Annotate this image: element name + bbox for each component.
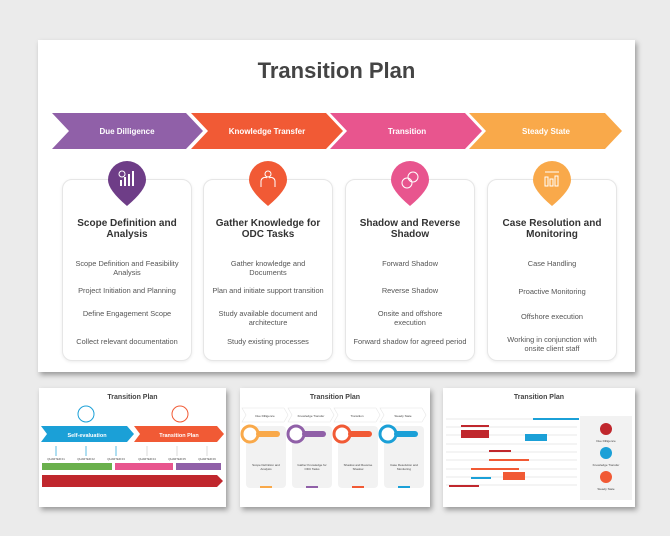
card: Gather Knowledge: Plan and initiate support transition	[212, 286, 324, 295]
thumbnail 3: Due Dilligence	[596, 439, 616, 443]
card: Case Resolution: Case Resolution and	[503, 218, 601, 229]
thumbnail 1: QUARTER 04	[138, 457, 156, 461]
thumbnail 1: QUARTER 06	[198, 457, 216, 461]
thumbnail 2: Monitoring	[397, 467, 411, 471]
chevron: Steady State: Steady State	[522, 127, 571, 136]
thumbnail 2: Transition Plan	[310, 394, 360, 401]
card: Scope Definition: Scope Definition and Feasibility	[75, 259, 179, 268]
chevron: Due Dilligence: Due Dilligence	[99, 127, 155, 136]
card: Case Resolution: Case Handling	[528, 259, 576, 268]
card: Shadow: Reverse Shadow	[382, 286, 438, 295]
card: Scope Definition: Project Initiation and Planning	[78, 286, 176, 295]
chevron: Transition	[330, 113, 482, 149]
card: Gather Knowledge: ODC Tasks	[242, 229, 294, 240]
card: Case Resolution	[487, 179, 617, 361]
chevron: Transition: Transition	[388, 127, 426, 136]
thumbnail 2: Gather Knowledge for	[297, 463, 327, 467]
chevron: Knowledge Transfer	[191, 113, 343, 149]
card: Gather Knowledge: Study existing processes	[227, 337, 309, 346]
thumbnail 1: QUARTER 01	[47, 457, 65, 461]
chevron: Steady State	[469, 113, 622, 149]
card: Shadow: Shadow	[391, 229, 429, 240]
thumbnail 1: QUARTER 02	[77, 457, 95, 461]
pin: shadow icon	[391, 161, 429, 206]
thumbnail 2: Shadow and Reverse	[344, 463, 373, 467]
card: Gather Knowledge	[203, 179, 333, 361]
thumbnail 1: Transition Plan	[159, 433, 199, 439]
card: Case Resolution: Offshore execution	[521, 312, 583, 321]
card: Shadow: execution	[394, 318, 426, 327]
thumbnail 2: Analysis	[260, 467, 272, 471]
card: Gather Knowledge: Study available document and	[218, 309, 318, 318]
card: Scope Definition	[62, 179, 192, 361]
card: Shadow: Forward Shadow	[382, 259, 438, 268]
pin: knowledge icon	[249, 161, 287, 206]
thumbnail 2: Scope Definition and	[252, 463, 280, 467]
thumbnail 2: ODC Tasks	[304, 467, 320, 471]
thumbnail 3: Transition Plan	[514, 394, 564, 401]
thumbnail 3: Steady State	[597, 487, 615, 491]
card: Gather Knowledge: Documents	[249, 268, 287, 277]
card: Gather Knowledge: Gather Knowledge for	[216, 218, 320, 229]
card: Shadow	[345, 179, 475, 361]
thumbnail 2: Case Resolution and	[390, 463, 418, 467]
card: Gather Knowledge: architecture	[249, 318, 287, 327]
thumbnail 1: QUARTER 03	[107, 457, 125, 461]
card: Scope Definition: Define Engagement Scope	[83, 309, 171, 318]
card: Scope Definition: Analysis	[106, 229, 148, 240]
thumbnail 1: Self-evaluation	[67, 433, 107, 439]
card: Shadow: Forward shadow for agreed period	[354, 337, 466, 346]
card: Scope Definition: Scope Definition and	[77, 218, 177, 229]
thumbnail 2	[240, 388, 430, 507]
thumbnail 1: QUARTER 05	[168, 457, 186, 461]
pin: analysis icon	[108, 161, 146, 206]
thumbnail 2: Due Dilligence	[255, 414, 275, 418]
thumbnail 2: Transition	[350, 414, 364, 418]
card: Scope Definition: Analysis	[113, 268, 141, 277]
thumbnail 3: Knowledge Transfer	[593, 463, 619, 467]
thumbnail 3	[443, 388, 635, 507]
thumbnail 2: Steady State	[394, 414, 412, 418]
thumbnail 2: Shadow	[353, 467, 364, 471]
title: Transition Plan	[258, 58, 415, 83]
thumbnail 1	[39, 388, 226, 507]
card: Case Resolution: Monitoring	[526, 229, 578, 240]
card: Case Resolution: onsite client staff	[525, 344, 579, 353]
card: Scope Definition: Collect relevant documentation	[76, 337, 178, 346]
chevron: Due Dilligence	[52, 113, 203, 149]
card: Case Resolution: Working in conjunction with	[507, 335, 597, 344]
card: Shadow: Onsite and offshore	[378, 309, 442, 318]
card: Case Resolution: Proactive Monitoring	[518, 287, 586, 296]
card: Gather Knowledge: Gather knowledge and	[231, 259, 305, 268]
chevron: Knowledge Transfer: Knowledge Transfer	[229, 127, 305, 136]
card: Shadow: Shadow and Reverse	[360, 218, 460, 229]
thumbnail 2: Knowledge Transfer	[298, 414, 324, 418]
thumbnail 1: Transition Plan	[107, 394, 158, 401]
main slide	[38, 40, 635, 372]
pin: monitoring icon	[533, 161, 571, 206]
